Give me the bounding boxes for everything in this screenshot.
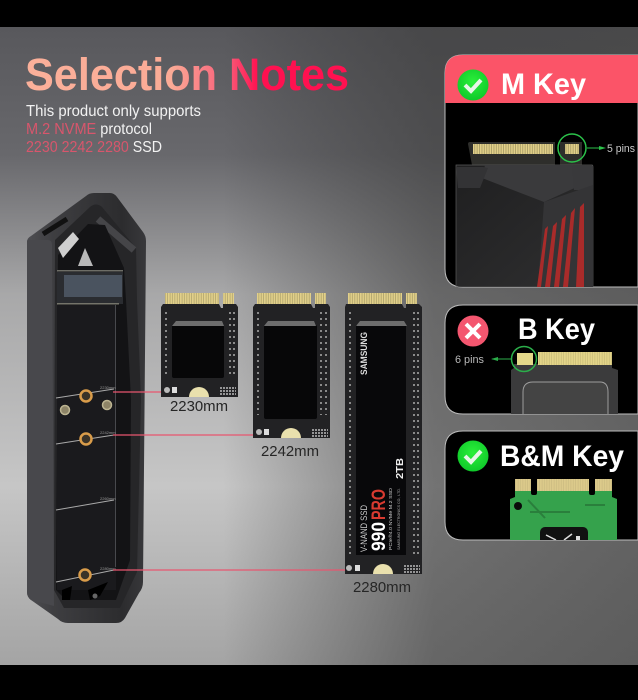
SSD label text: SAMSUNG bbox=[359, 332, 369, 375]
M.2 connector bbox=[57, 270, 123, 304]
red leader lines bbox=[113, 392, 345, 570]
enclosure: M.2 SSD case: 2260mm bbox=[100, 496, 116, 501]
icon: red cross bbox=[458, 316, 488, 346]
panel: B&amp;M Key bbox=[445, 431, 638, 547]
callout: 6 pins: 6 pins bbox=[455, 354, 484, 366]
enclosure: M.2 SSD case: 2230mm bbox=[100, 385, 116, 390]
icon: green check bbox=[458, 70, 488, 100]
M Key drive illustration bbox=[456, 142, 593, 287]
M Key heading: M Key bbox=[501, 68, 586, 101]
B&amp;M Key module illustration bbox=[510, 479, 617, 540]
description text bbox=[26, 103, 201, 156]
warning label bbox=[58, 232, 79, 258]
SSD 2242 bbox=[253, 293, 330, 438]
callout: 5 pins bbox=[558, 134, 635, 162]
screw posts bbox=[80, 390, 92, 580]
SSD 2280: Samsung 990 PRO bbox=[345, 293, 422, 574]
label: 2230mm: 2230mm bbox=[170, 398, 228, 415]
SSD label text: 990 bbox=[369, 522, 390, 551]
bottom notches bbox=[62, 582, 108, 600]
description text: This product only supports bbox=[26, 103, 201, 120]
description text: M.2 NVME protocol bbox=[26, 121, 152, 138]
description text: 2230 2242 2280 SSD bbox=[26, 139, 162, 156]
B Key drive illustration bbox=[511, 352, 618, 414]
SSD 2230 bbox=[161, 293, 238, 397]
SSD label text: PCIe®4.0 NVMe M.2 SSD bbox=[387, 487, 393, 550]
enclosure: M.2 SSD case: 2242mm bbox=[100, 430, 116, 435]
guide lines bbox=[56, 389, 114, 582]
callout: 5 pins: 5 pins bbox=[607, 143, 635, 155]
SSD label text bbox=[359, 332, 406, 552]
title: Selection Notes bbox=[25, 49, 349, 100]
B&amp;M Key heading: B&M Key bbox=[500, 440, 624, 473]
inner cavity bbox=[56, 224, 131, 600]
label: 2242mm: 2242mm bbox=[261, 443, 319, 460]
icon: green check bbox=[458, 440, 488, 472]
enclosure: M.2 SSD case: 2280mm bbox=[100, 566, 116, 571]
enclosure: M.2 SSD case bbox=[27, 193, 146, 623]
panel: M Key bbox=[445, 55, 638, 287]
SSD label text: PRO bbox=[369, 489, 390, 520]
PCB plate bbox=[57, 305, 116, 590]
B Key heading: B Key bbox=[518, 313, 595, 346]
callout: 6 pins bbox=[455, 346, 536, 372]
panel: B Key bbox=[445, 305, 638, 414]
M Key header bbox=[445, 55, 638, 103]
SSD label text: 2TB bbox=[395, 458, 406, 479]
label: 2280mm: 2280mm bbox=[353, 579, 411, 596]
SSD label text: V-NAND SSD bbox=[359, 505, 369, 552]
SSD label text: SAMSUNG ELECTRONICS CO., LTD. bbox=[396, 488, 401, 550]
